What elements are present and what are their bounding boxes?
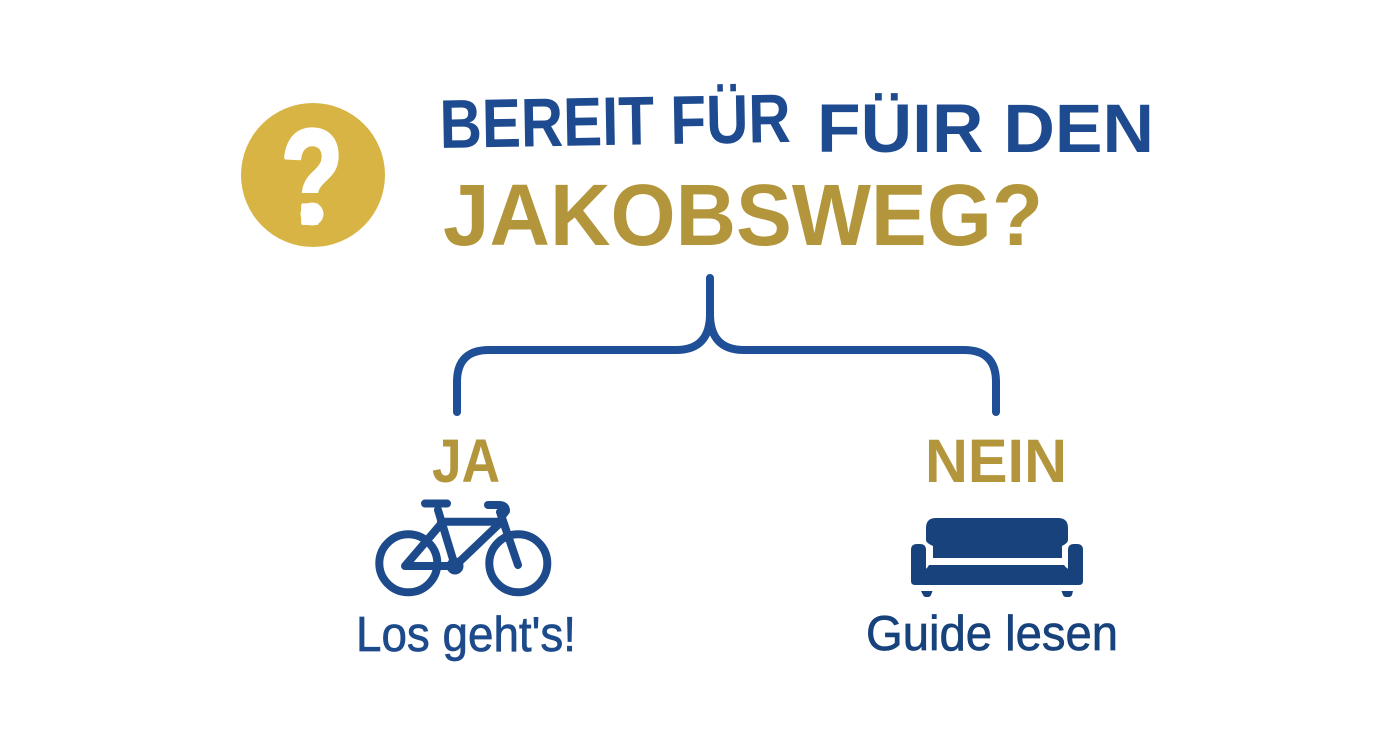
icon: question mark circle — [241, 103, 385, 252]
title line: Füir den: FÜIR DEN — [817, 90, 1154, 167]
title line: Jakobsweg: JAKOBSWEG? — [443, 167, 1043, 264]
icon: question mark circle: ? — [281, 103, 343, 252]
branching connector — [457, 278, 996, 412]
option label: Ja: JA — [432, 427, 500, 495]
title line: Bereit für: BEREIT FÜR — [439, 80, 791, 163]
caption: Guide lesen: Guide lesen — [866, 607, 1118, 661]
icon: sofa — [911, 518, 1083, 597]
icon: bicycle — [379, 504, 547, 592]
caption: Los geht's: Los geht's! — [356, 608, 576, 662]
option label: Nein: NEIN — [925, 427, 1067, 495]
